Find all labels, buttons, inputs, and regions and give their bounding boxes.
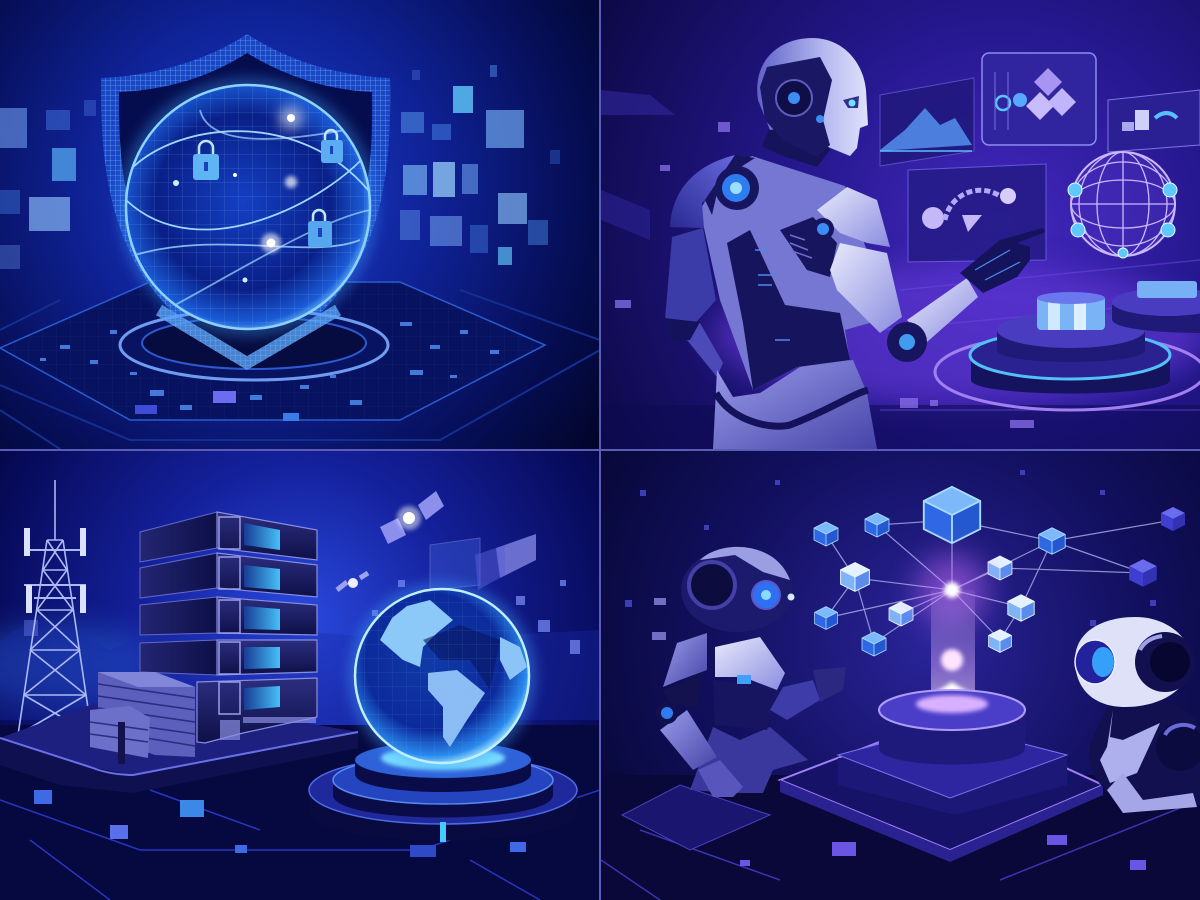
hologram screen: small bars: [1108, 90, 1200, 152]
hologram screen: line chart: [880, 78, 974, 166]
robot torso: [700, 156, 880, 390]
robot hand pointing: [960, 228, 1045, 293]
left robot head: [681, 548, 793, 632]
right robot chest: [1100, 710, 1160, 783]
wireframe sphere: [1068, 152, 1177, 258]
robot neck: [762, 128, 830, 167]
shield: [100, 34, 390, 315]
transmission tower: [18, 480, 92, 735]
server rack stack: [140, 512, 317, 743]
left robot hips: [690, 727, 808, 793]
podium stacks: [935, 281, 1200, 410]
floating data tiles left and right: [0, 65, 560, 269]
light beam and glow: [917, 555, 987, 720]
globe with locks: [118, 77, 380, 337]
central pedestal: [780, 690, 1103, 862]
panel: cybersecurity shield and globe: [0, 0, 600, 449]
storage blocks: [90, 672, 195, 764]
robot right shoulder and arm: [817, 187, 890, 247]
robot shoulder orb: [715, 166, 759, 210]
network lines: [826, 520, 1173, 643]
server platform: [0, 705, 358, 793]
hologram screen: diamond diagram: [982, 53, 1096, 145]
panel: small robots and cube network: [601, 451, 1200, 900]
earth globe: [348, 582, 536, 770]
right robot dark body: [1089, 700, 1200, 805]
robot hips and legs: [713, 360, 877, 449]
left robot upper arm: [663, 633, 707, 687]
humanoid robot: [664, 38, 1045, 449]
robot left shoulder: [670, 155, 745, 228]
left robot chest: [715, 637, 785, 690]
bright nodes: [173, 106, 303, 282]
circuit floor platform: [0, 282, 600, 449]
floating data tiles: [24, 534, 580, 654]
robot head: [757, 38, 868, 156]
background floor glow: [601, 90, 1200, 449]
right robot head: [1075, 617, 1193, 707]
right robot shoulder: [1156, 723, 1200, 771]
base ring: [120, 310, 388, 380]
globe pedestal: [309, 742, 577, 842]
network cubes: [814, 487, 1185, 656]
right robot lower body: [1107, 773, 1197, 813]
hologram screen: gauge: [908, 164, 1046, 262]
floor: [601, 470, 1200, 900]
icon: satellite small: [337, 573, 368, 590]
left robot forearm and hand: [660, 710, 717, 770]
left robot lower torso: [713, 680, 780, 730]
left robot right arm and fist: [770, 680, 820, 720]
hills and ground: [0, 615, 600, 900]
icon: padlocks: [193, 130, 343, 247]
robot left arm: [665, 228, 716, 322]
panel: humanoid robot and holographic screens: [601, 0, 1200, 449]
right robot: [1075, 617, 1200, 813]
icon: satellite large: [380, 491, 444, 544]
panel: telecom tower, servers and earth: [0, 451, 600, 900]
left robot: [622, 547, 846, 850]
